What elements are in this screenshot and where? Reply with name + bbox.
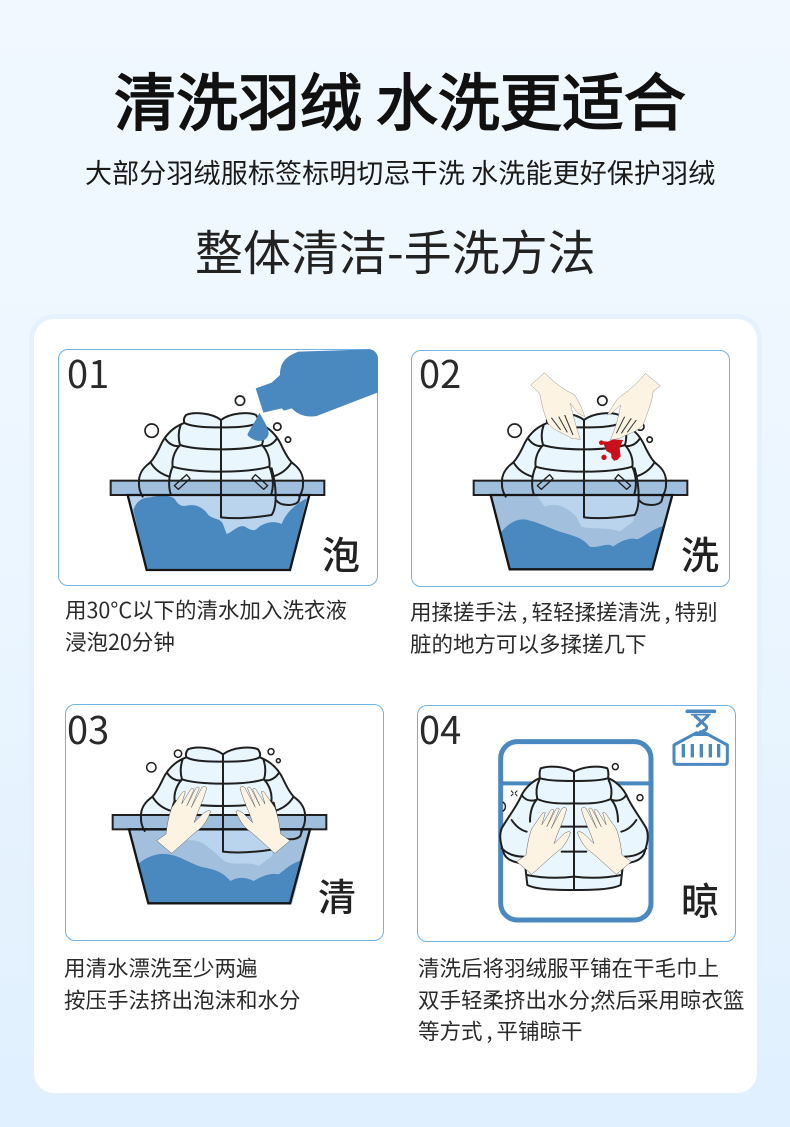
panel frame 02 xyxy=(411,350,730,587)
panel 01 text: 用30°C以下的清水加入洗衣液 xyxy=(65,594,347,625)
panel 02 text xyxy=(410,596,718,658)
section heading: 整体清洁-手洗方法 xyxy=(195,214,596,284)
jacket xyxy=(500,767,648,890)
hands xyxy=(517,807,631,874)
bubbles xyxy=(503,764,643,811)
panel 02 keyword: 洗 xyxy=(681,525,719,580)
illustration 04: pressing jacket on towel xyxy=(500,711,727,920)
panel 02 number: 02 xyxy=(419,344,461,399)
panel 04 number: 04 xyxy=(419,700,461,755)
bubbles xyxy=(145,396,291,442)
panel 02 text: 用揉搓手法,轻轻揉搓清洗,特别 xyxy=(410,596,718,627)
bottle xyxy=(247,349,380,441)
basin rim xyxy=(474,481,687,495)
basin rim xyxy=(113,815,326,829)
towel frame xyxy=(501,742,651,920)
illustration 01: jacket soaking in basin xyxy=(111,349,380,570)
panel 03 text: 用清水漂洗至少两遍 xyxy=(64,952,258,983)
panel 04 text: 等方式,平铺晾干 xyxy=(418,1015,583,1046)
panel frame 01 xyxy=(58,349,378,586)
panel 04 text: 清洗后将羽绒服平铺在干毛巾上 xyxy=(418,952,719,983)
stain xyxy=(599,439,623,461)
illustration 02: rubbing jacket in basin xyxy=(474,373,687,570)
panel 04 text xyxy=(418,952,745,1046)
basin outline xyxy=(128,495,309,570)
panel 03 number: 03 xyxy=(67,700,109,755)
panel 03 text xyxy=(64,952,301,1014)
hands xyxy=(157,786,290,853)
illustration 03: rinsing jacket in basin xyxy=(113,748,326,904)
panel: white card xyxy=(34,319,757,1093)
bubbles xyxy=(147,749,280,772)
bubbles xyxy=(508,396,652,442)
icon: hanging basket xyxy=(674,711,727,764)
panel 01 text xyxy=(65,594,347,656)
panel frame 03 xyxy=(65,704,384,941)
subtitle: 大部分羽绒服标签标明切忌干洗 水洗能更好保护羽绒 xyxy=(85,152,715,191)
title: 清洗羽绒 水洗更适合 xyxy=(114,53,686,143)
panel 04 keyword: 晾 xyxy=(681,871,719,926)
panel 02 text: 脏的地方可以多揉搓几下 xyxy=(410,628,647,658)
panel 01 number: 01 xyxy=(67,344,109,399)
basin rim xyxy=(111,481,324,495)
illustrations xyxy=(110,349,729,922)
panel 03 keyword: 清 xyxy=(318,867,356,922)
panel 01 keyword: 泡 xyxy=(322,525,360,580)
water xyxy=(133,496,307,569)
panel 03 text: 按压手法挤出泡沫和水分 xyxy=(64,984,301,1014)
panel frame 04 xyxy=(417,705,736,942)
panel 01 text: 浸泡20分钟 xyxy=(65,626,175,656)
hands xyxy=(531,373,660,440)
panel 04 text: 双手轻柔挤出水分;然后采用晾衣篮 xyxy=(418,984,745,1014)
